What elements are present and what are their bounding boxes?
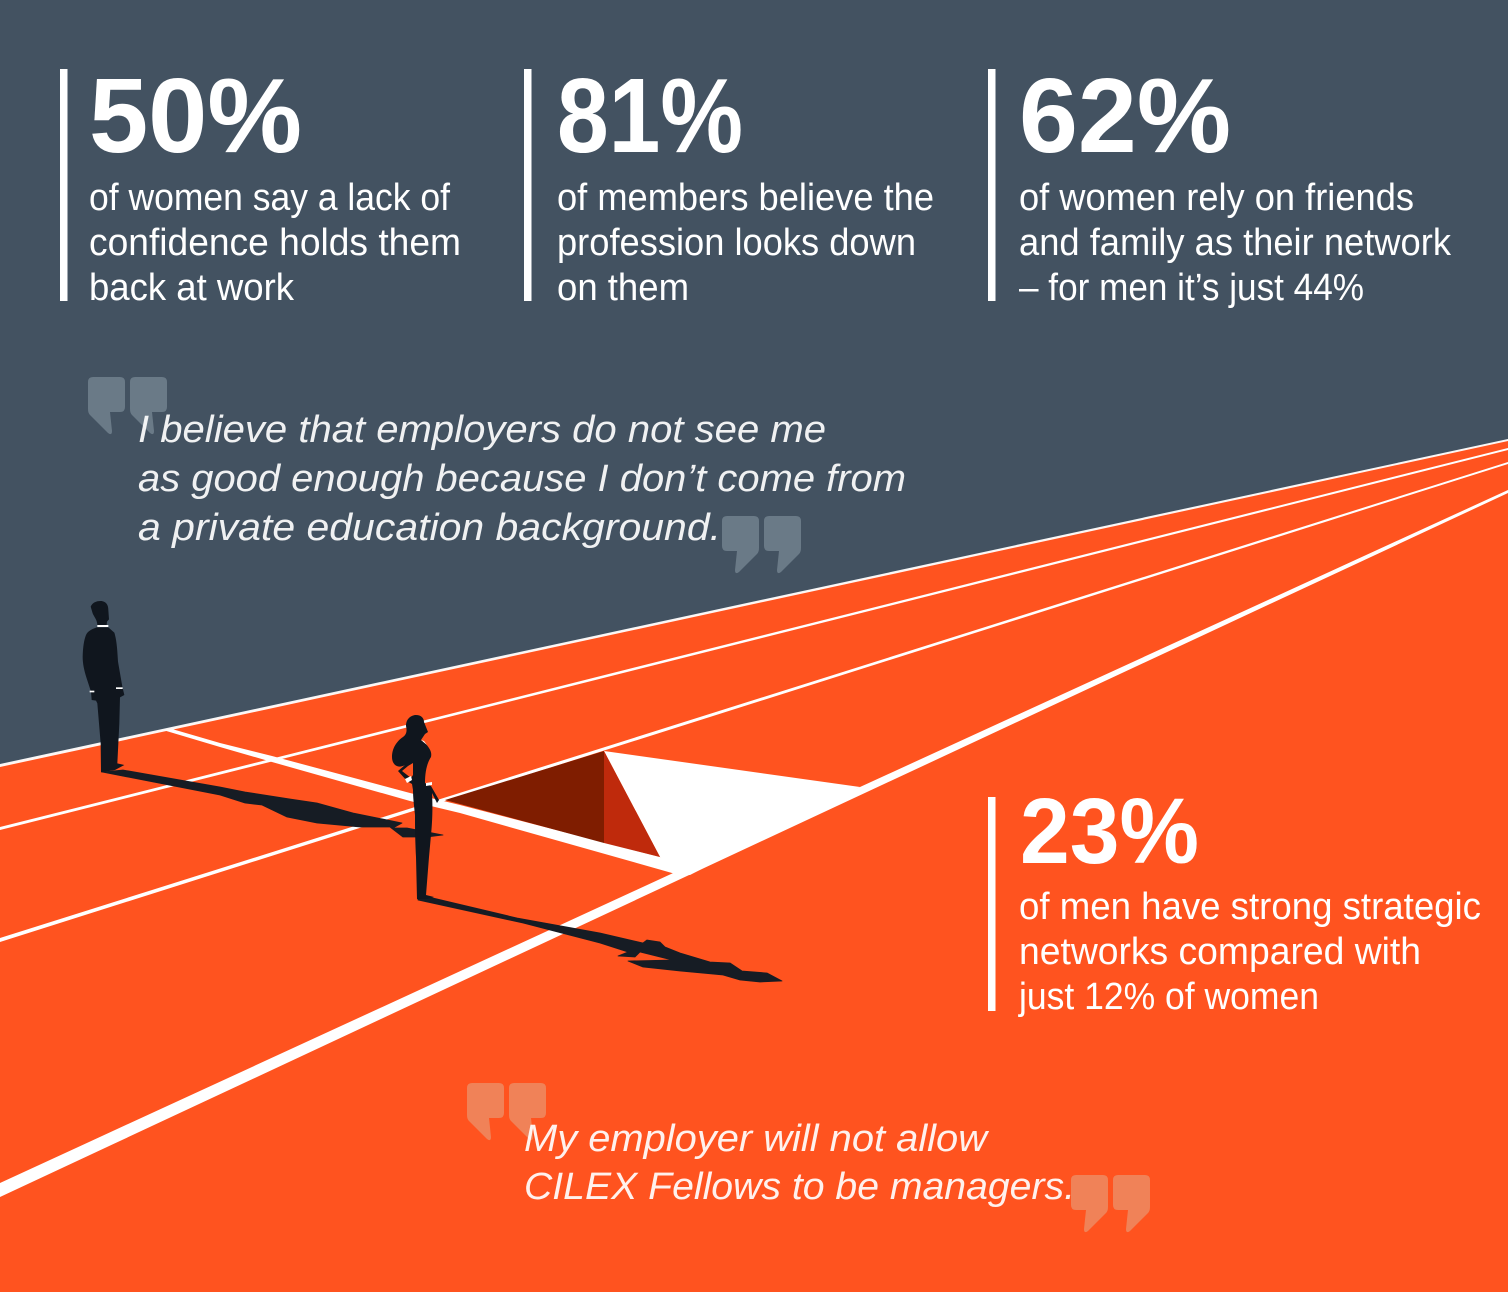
lane line 4 — [0, 490, 1508, 1197]
icon: closing quote marks, slate — [722, 516, 801, 573]
stat: 23%: 23% — [1020, 779, 1199, 883]
icon: opening quote marks, slate — [88, 377, 167, 434]
stat: 50% — [60, 57, 461, 309]
stat: 81%: 81% — [557, 57, 743, 175]
man silhouette — [83, 601, 124, 772]
icon: opening quote marks, orange — [467, 1083, 546, 1140]
stat: 62%: of women rely on friends — [1019, 177, 1414, 219]
stat: 23%: networks compared with — [1019, 931, 1421, 973]
stat: 23% — [988, 779, 1481, 1018]
stat: 62% — [988, 57, 1452, 309]
stat: 62%: – for men it’s just 44% — [1019, 267, 1364, 309]
lane line 2 — [0, 448, 1508, 830]
quote: employers: a private education background. — [138, 507, 721, 549]
stat: 50%: confidence holds them — [89, 222, 461, 264]
stat: 81%: on them — [557, 267, 689, 309]
track horizon line — [0, 439, 1508, 767]
man's shadow — [102, 770, 443, 837]
icon: closing quote marks, orange — [1071, 1175, 1150, 1232]
stat: 50%: back at work — [89, 267, 295, 309]
quote: CILEX Fellows: My employer will not allow — [524, 1118, 990, 1160]
lane line 3 — [0, 462, 1508, 942]
quote: CILEX Fellows: CILEX Fellows to be managers. — [524, 1166, 1075, 1208]
stat: 62%: and family as their network — [1019, 222, 1452, 264]
woman silhouette — [392, 715, 439, 899]
start line — [163, 729, 680, 875]
quote: employers: I believe that employers do not see me — [138, 409, 826, 451]
stat: 23%: of men have strong strategic — [1019, 886, 1481, 928]
woman's shadow — [418, 897, 782, 982]
quote: employers — [138, 409, 906, 549]
quote: CILEX Fellows — [524, 1118, 1075, 1208]
stat: 23%: just 12% of women — [1018, 976, 1319, 1018]
stat: 62%: 62% — [1019, 57, 1231, 175]
quote: employers: as good enough because I don’t come from — [138, 458, 906, 500]
stat: 50%: of women say a lack of — [89, 177, 450, 219]
hole in the track — [445, 751, 860, 875]
stat: 81%: profession looks down — [557, 222, 916, 264]
running track — [0, 439, 1508, 1292]
stat: 81% — [524, 57, 934, 309]
stat: 81%: of members believe the — [557, 177, 934, 219]
stat: 50%: 50% — [89, 57, 302, 175]
